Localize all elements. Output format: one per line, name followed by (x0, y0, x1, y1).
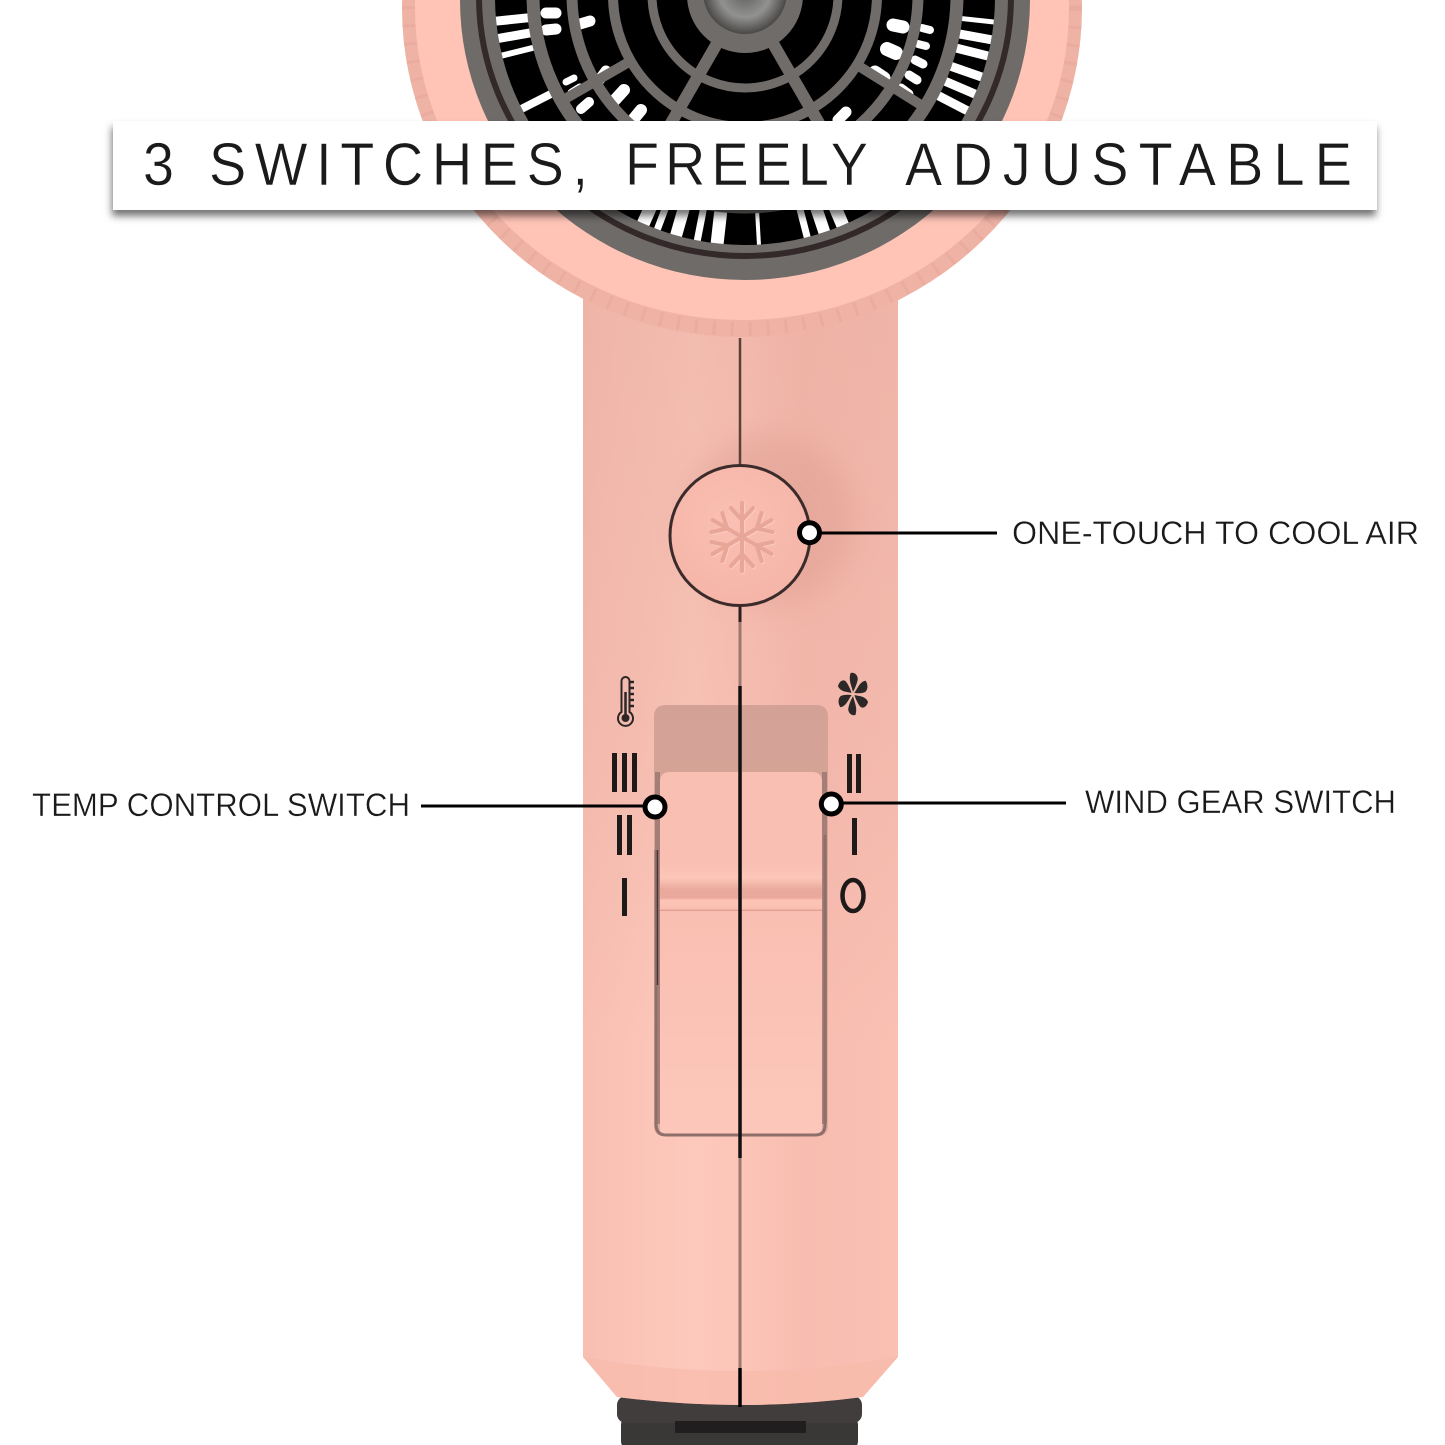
wind slider (742, 772, 822, 1134)
bottom stripes (637, 210, 849, 245)
side channel shading (655, 772, 827, 1124)
light ring (415, 0, 1069, 320)
icon: fan (837, 673, 869, 715)
white fan fins (491, 13, 999, 252)
left outer stripes (491, 18, 552, 111)
recess (654, 705, 828, 1136)
button shading (685, 435, 855, 605)
housing outline (656, 835, 825, 1135)
right outer stripes (937, 18, 999, 113)
icon: snowflake highlight (708, 504, 778, 572)
title banner: ADJUSTABLE (905, 132, 1352, 198)
cool air button (670, 466, 810, 606)
center seam (739, 338, 741, 1407)
switch housing (654, 686, 828, 1158)
callout: temp control: TEMP CONTROL SWITCH (32, 787, 410, 823)
left chips (546, 13, 641, 121)
dryer head (402, 0, 1082, 337)
icon: snowflake (707, 503, 777, 571)
callout: temp control (32, 787, 665, 823)
right chips (838, 25, 930, 120)
callout: wind gear (821, 784, 1396, 820)
housing seam (738, 686, 742, 1158)
title banner: 3 (143, 132, 174, 198)
title banner: FREELY (625, 132, 868, 198)
dark channel edge (656, 850, 658, 985)
callout: cool air (800, 515, 1419, 551)
callout: cool air: ONE-TOUCH TO COOL AIR (1012, 515, 1419, 551)
callout: wind gear: WIND GEAR SWITCH (1085, 784, 1396, 820)
outer shell (402, 0, 1082, 337)
grill (533, 0, 957, 207)
temperature level marks (612, 753, 637, 916)
dark gasket (479, 0, 1011, 256)
shell texture (409, 0, 1075, 329)
grey rim (460, 0, 1030, 280)
temperature slider (660, 772, 739, 1134)
title banner (113, 121, 1377, 210)
dryer handle (583, 280, 898, 1405)
wind level marks (842, 754, 864, 911)
hair dryer product (402, 0, 1082, 1445)
hub and lens (687, 0, 803, 53)
title banner: SWITCHES, (209, 132, 588, 198)
black fan disc (495, 0, 995, 245)
icon: thermometer (618, 677, 634, 726)
dryer base collar (617, 1396, 862, 1445)
